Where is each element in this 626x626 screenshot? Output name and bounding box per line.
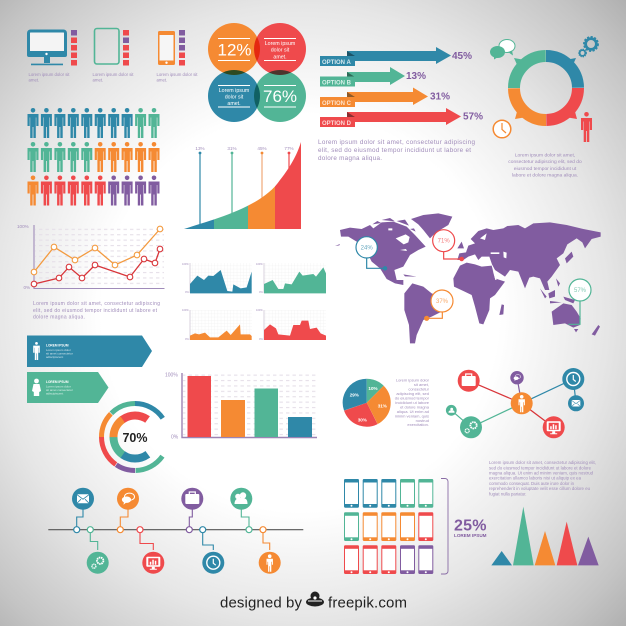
- overlapping percent circles: amet.: [273, 54, 287, 60]
- marker: 57%: 57%: [574, 288, 587, 294]
- curve area chart with markers: 77%: [284, 146, 294, 151]
- node: clock: [202, 552, 224, 574]
- text block: pie description: consectetur: [408, 386, 430, 392]
- banner: male: adiscipiscent: [46, 355, 63, 359]
- text block: triangles description: reprehenderit in voluptate velit esse cillum dolore eu: [489, 486, 591, 491]
- text block: arrows description: elit, sed do eiusmod tempor incididunt ut labore et: [318, 147, 471, 154]
- phone grid: [344, 479, 433, 574]
- small area charts: [182, 262, 326, 341]
- arrow: option B: OPTION B: [322, 80, 352, 86]
- map: Americas: [335, 213, 452, 343]
- text block: triangles description: Lorem ipsum dolor sit amet, consectetur adipiscing elit,: [489, 460, 596, 465]
- small area charts: 100%: [182, 262, 189, 266]
- arrow: option D: [320, 108, 483, 127]
- text block: pie description: Lorem ipsum dolor: [396, 378, 430, 382]
- device icon: tablet with squares: [94, 28, 129, 66]
- overlapping percent circles: [208, 23, 306, 122]
- device caption 1: Lorem ipsum dolor sit: [28, 72, 70, 77]
- device caption 3: Lorem ipsum dolor sit: [156, 72, 198, 77]
- small area charts: 0%: [259, 337, 263, 341]
- marker: 37%: [425, 290, 453, 320]
- arrow: option C: 31%: [430, 92, 450, 102]
- device icon: phone with squares: [158, 30, 185, 66]
- device caption 2: amet.: [92, 78, 103, 82]
- text block: triangles description: magna aliqua. Ut enim ad minim veniam, quis nostrud: [489, 471, 594, 476]
- text block: pie description: sit amet,: [414, 382, 429, 387]
- curve area chart with markers: 31%: [227, 146, 237, 151]
- marker: 37%: 37%: [436, 299, 449, 305]
- marker: 71%: 71%: [438, 239, 450, 245]
- arrow: option D: OPTION D: [322, 121, 352, 127]
- banner: male: Lorem ipsum dolor: [46, 348, 71, 352]
- stat: 25%: 25%: [454, 518, 486, 534]
- small area charts: 0%: [185, 337, 189, 341]
- banner: female: adiscipiscent: [46, 392, 63, 396]
- overlapping percent circles: dolor sit: [225, 94, 244, 100]
- device caption 3: amet.: [156, 78, 167, 82]
- stat: 25%: LOREM IPSUM: [454, 533, 487, 538]
- map markers: [356, 230, 591, 324]
- text block: donut description: Lorem ipsum dolor sit amet,: [515, 152, 575, 158]
- text block: donut description: consectetur adipiscing elit, sed do: [508, 159, 582, 165]
- line chart: 100%: [17, 224, 29, 229]
- radial progress 70%: [88, 390, 182, 484]
- text block: pie description: nostrud: [416, 418, 429, 423]
- bracket: [441, 478, 448, 574]
- text block: triangles description: exercitation ullamco laboris nisi ut aliquip ex ea: [489, 476, 582, 481]
- bar chart: 0%: [171, 434, 179, 440]
- option arrows: [320, 47, 483, 127]
- text block: pie description: exercitation.: [407, 422, 429, 427]
- small area charts: 100%: [182, 308, 189, 312]
- pie chart: 31%: [378, 404, 387, 408]
- text block: arrows description: Lorem ipsum dolor sit amet, consectetur adipiscing: [318, 139, 475, 146]
- arrow: option B: [320, 67, 426, 86]
- text block: triangles description: commodo consequat. Duis aute irure dolor in: [489, 481, 575, 486]
- curve area chart with markers: [184, 140, 302, 230]
- banner: male: [27, 336, 152, 367]
- overlapping percent circles: Lorem ipsum: [265, 41, 295, 47]
- marker: 57%: [568, 279, 591, 324]
- footer credit: freepik.com: [328, 594, 407, 612]
- overlapping percent circles: 76%: [263, 87, 297, 106]
- pie chart: [350, 386, 387, 422]
- line chart: [17, 224, 164, 290]
- line chart: 0%: [24, 285, 30, 290]
- text block: pie description: adipiscing elit, sed: [396, 391, 429, 396]
- pie chart: 30%: [358, 418, 367, 422]
- curve area chart with markers: 13%: [195, 146, 205, 151]
- text block: pie description: do eiusmod tempor: [395, 396, 430, 400]
- banner: female: sit amet consectetur: [46, 388, 73, 392]
- network diagram: [446, 368, 584, 438]
- banner: male: LOREM IPSUM: [46, 344, 69, 348]
- overlapping percent circles: Lorem ipsum: [219, 88, 249, 94]
- world map: [335, 213, 601, 343]
- text block: pie description: minim veniam, quis: [395, 414, 429, 418]
- arrow: option C: OPTION C: [322, 101, 352, 107]
- text block: line chart description: dolore magna aliqua.: [33, 314, 85, 320]
- device caption 1: amet.: [28, 78, 39, 82]
- people pictogram rows: [28, 108, 160, 206]
- small area charts: 100%: [256, 262, 263, 266]
- arrow: option A: OPTION A: [322, 60, 351, 66]
- marker: 71%: [433, 230, 463, 261]
- arrow: option A: 45%: [452, 51, 472, 62]
- footer credit: designed by: [220, 594, 302, 612]
- small area charts: 0%: [259, 290, 263, 294]
- map: old world: [453, 222, 601, 336]
- arrow: option D: 57%: [463, 112, 483, 122]
- text block: pie description: et dolore magna: [400, 404, 430, 410]
- arrow: option C: [320, 88, 450, 107]
- banner: female: LOREM IPSUM: [46, 380, 69, 384]
- banner: male: sit amet consectetur: [46, 352, 73, 356]
- node: gears: [87, 552, 109, 574]
- text block: arrows description: dolore magna aliqua.: [318, 155, 382, 162]
- device icon: monitor with squares: [27, 30, 77, 66]
- marker: 24%: 24%: [361, 245, 373, 251]
- pie chart: 10%: [368, 386, 378, 391]
- text block: donut description: eiusmod tempor incididunt ut: [514, 166, 577, 172]
- text block: pie description: incididunt ut labore: [395, 400, 430, 405]
- arrow: option B: 13%: [406, 71, 426, 82]
- overlapping percent circles: 12%: [217, 40, 252, 60]
- bar chart: [165, 372, 317, 440]
- node: users: [230, 488, 252, 510]
- triangle chart: [491, 507, 599, 565]
- pie chart: 29%: [350, 392, 359, 398]
- node: monitor: [142, 552, 164, 574]
- timeline: [48, 488, 303, 574]
- icon: chat bubbles: [490, 40, 515, 60]
- text block: donut description: labore et dolore magna aliqua.: [512, 172, 578, 178]
- text block: line chart description: Lorem ipsum dolor sit amet, consectetur adipiscing: [33, 301, 160, 307]
- text block: triangles description: fugiat nulla pariatur.: [489, 492, 527, 496]
- footer credit: [220, 592, 407, 612]
- radial progress 70%: 70%: [122, 431, 148, 445]
- text block: line chart description: elit, sed do eiusmod tempor incididunt ut labore et: [33, 308, 158, 314]
- node: chat: [117, 488, 139, 510]
- node: briefcase: [181, 488, 203, 510]
- overlapping percent circles: dolor sit: [271, 48, 290, 54]
- small area charts: 0%: [185, 290, 189, 294]
- arrow: option A: [320, 47, 472, 66]
- banner: female: [27, 372, 108, 403]
- icon: person: [581, 112, 592, 142]
- icon: gears: [579, 37, 598, 57]
- overlapping percent circles: amet.: [227, 101, 241, 107]
- marker: 24%: [356, 237, 387, 270]
- curve area chart with markers: 45%: [257, 146, 267, 151]
- text block: triangles description: sed do eiusmod tempor incididunt ut labore et dolore: [489, 465, 592, 470]
- device caption 2: Lorem ipsum dolor sit: [92, 72, 134, 77]
- small area charts: 100%: [256, 308, 263, 312]
- banner: female: Lorem ipsum dolor: [46, 384, 71, 388]
- icon: clock: [493, 120, 511, 138]
- text block: pie description: aliqua. Ut enim ad: [397, 409, 429, 414]
- segmented donut with icons: [490, 37, 598, 142]
- node: mail: [72, 488, 94, 510]
- node: person: [259, 552, 281, 574]
- bar chart: 100%: [165, 372, 178, 378]
